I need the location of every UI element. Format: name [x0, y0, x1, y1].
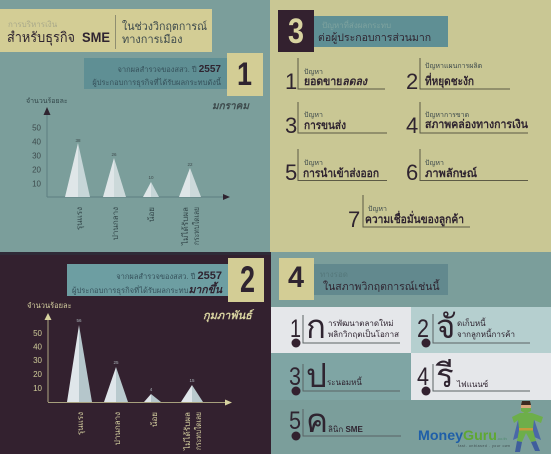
problem 1: ยอดขายลดลง	[304, 76, 368, 88]
solution 4: 4	[417, 363, 429, 391]
solution 1: ารพัฒนาตลาดใหม่	[328, 319, 394, 328]
problem 4: สภาพคล่องทางการเงิน	[425, 118, 528, 131]
chart: January: ปานกลาง	[111, 207, 120, 240]
number badge 4	[279, 258, 314, 300]
problems heading: ปัญหาที่ส่งผลกระทบ	[322, 19, 391, 30]
problem 7	[348, 195, 470, 232]
title block: ทางการเมือง	[122, 33, 183, 46]
problem 6	[406, 149, 528, 185]
solution 2: ดเก็บหนี้	[457, 317, 486, 328]
problem 2: ที่หยุดชะงัก	[425, 72, 474, 89]
solution 5	[289, 402, 401, 440]
chart: January: น้อย	[147, 207, 156, 222]
chart: January: 20	[32, 166, 42, 174]
chart: January: 40	[32, 138, 42, 146]
chart: January	[26, 97, 230, 246]
problem 5: การนำเข้าส่งออก	[303, 166, 379, 180]
number badge 3	[278, 10, 314, 52]
solution 5: ค	[306, 402, 328, 439]
survey caption 1: จากผลสำรวจของสสว. ปี 2557	[118, 64, 221, 75]
solution 5: ลินิก SME	[328, 425, 363, 434]
chart: February: 56	[76, 318, 82, 323]
logo: MoneyGuru: .co.th	[497, 436, 507, 441]
problem 6: ปัญหา	[425, 159, 444, 167]
problem 2: ปัญหาแผนการผลิต	[425, 62, 483, 70]
solution 3: ป	[306, 357, 327, 394]
problem 5: 5	[285, 160, 297, 185]
chart: January: 10	[32, 180, 42, 188]
chart: February: 10	[33, 384, 43, 393]
problem 3: ปัญหา	[304, 111, 323, 119]
chart: January: กระทบใดเลย	[192, 207, 201, 245]
problem 4: ปัญหาการขาด	[425, 111, 469, 119]
title block: ในช่วงวิกฤตการณ์	[122, 20, 207, 33]
problem 1: 1	[285, 69, 297, 94]
solution 3	[289, 357, 400, 396]
survey caption 1	[84, 58, 227, 89]
chart: February: 25	[113, 360, 119, 365]
solution 4	[417, 357, 530, 396]
month label February: กุมภาพันธ์	[203, 309, 255, 323]
icon: superhero mascot	[512, 401, 543, 452]
problem 1: ปัญหา	[304, 68, 323, 76]
problem 7: 7	[348, 207, 360, 232]
chart: February: 30	[33, 356, 43, 365]
title block: การบริหารเงิน	[8, 20, 58, 29]
number badge 3: 3	[288, 12, 304, 51]
problem 7: ปัญหา	[368, 205, 387, 213]
chart: February: 4	[150, 387, 153, 392]
problem 5: ปัญหา	[304, 159, 323, 167]
chart: February	[27, 301, 232, 451]
chart: January: 26	[111, 152, 117, 157]
chart: February: 20	[33, 370, 43, 379]
problem 6: ภาพลักษณ์	[425, 166, 477, 180]
solution 1	[290, 308, 400, 348]
solutions heading: ทางรอด	[320, 270, 348, 279]
title block: สำหรับธุรกิจ	[7, 29, 75, 46]
solution 2: จั	[436, 308, 455, 345]
problem 4	[406, 102, 528, 138]
problem 6: 6	[406, 160, 418, 185]
problem 3: 3	[285, 113, 297, 138]
title block	[0, 9, 212, 52]
title block: SME	[82, 29, 110, 45]
solution 2: จากลูกหนี้การค้า	[457, 328, 515, 340]
solution 3: ระนอมหนี้	[327, 376, 363, 387]
chart: January: 22	[187, 162, 193, 167]
problem 3	[285, 102, 387, 138]
logo: MoneyGuru	[418, 427, 510, 448]
chart: January: 50	[32, 124, 42, 132]
survey caption 2: ผู้ประกอบการธุรกิจที่ได้รับผลกระทบมากขึ้น	[72, 281, 223, 296]
chart: January: 38	[75, 138, 81, 143]
problem 2: 2	[406, 69, 418, 94]
chart: February: จำนวนร้อยละ	[27, 301, 72, 310]
number badge 1	[227, 53, 263, 96]
chart: February: ปานกลาง	[113, 412, 122, 445]
chart: February: 40	[33, 342, 43, 352]
solution 4: รี	[435, 357, 454, 394]
chart: January: 10	[148, 175, 154, 180]
bars January	[65, 143, 201, 197]
panel: solutions	[271, 252, 551, 454]
solution 4: ไฟแนนซ์	[456, 379, 489, 389]
problem 2	[406, 58, 510, 94]
logo: MoneyGuru: fast. unbiased . your own	[458, 444, 510, 448]
chart: January: 30	[32, 152, 42, 160]
number badge 1: 1	[237, 56, 252, 92]
solution 3: 3	[289, 363, 301, 391]
panel: survey February	[0, 252, 271, 454]
survey caption 1: ผู้ประกอบการธุรกิจที่ได้รับผลกระทบดังนี้	[92, 77, 222, 87]
number badge 2: 2	[240, 259, 255, 300]
solution 5: 5	[289, 407, 301, 435]
solution cells background	[271, 307, 551, 400]
chart: February: 15	[189, 378, 195, 383]
problems heading	[314, 16, 448, 47]
chart: February: 50	[33, 329, 43, 338]
month label January: มกราคม	[212, 101, 250, 112]
panel: problems	[270, 0, 551, 252]
chart: February: น้อย	[150, 412, 159, 427]
solution 1: พลิกวิกฤตเป็นโอกาส	[328, 329, 399, 339]
chart: February: รุนแรง	[76, 412, 85, 435]
solution 1: 1	[290, 315, 301, 343]
solution 2: 2	[417, 315, 429, 343]
logo: MoneyGuru: Money	[418, 427, 463, 443]
solution 2	[417, 308, 530, 348]
problem 5	[285, 149, 387, 185]
solutions heading	[314, 264, 448, 295]
problem 3: การขนส่ง	[304, 119, 346, 132]
problem 4: 4	[406, 113, 418, 138]
survey caption 2: จากผลสำรวจของสสว. ปี 2557	[116, 270, 222, 282]
panel: survey January	[0, 0, 270, 252]
chart: January: รุนแรง	[75, 207, 84, 230]
chart: February: ไม่ได้รับผล	[183, 412, 192, 451]
solution 1: ก	[306, 308, 326, 345]
problems heading: ต่อผู้ประกอบการส่วนมาก	[318, 32, 431, 44]
chart: February: กระทบใดเลย	[194, 412, 203, 450]
chart: January: จำนวนร้อยละ	[26, 97, 68, 105]
problem 1	[285, 58, 385, 94]
problem 7: ความเชื่อมั่นของลูกค้า	[365, 210, 464, 227]
number badge 2	[228, 258, 264, 302]
bars February	[67, 325, 203, 402]
survey caption 2	[67, 264, 228, 296]
chart: January: ไม่ได้รับผล	[181, 207, 190, 246]
number badge 4: 4	[288, 261, 304, 294]
solutions heading: ในสภาพวิกฤตการณ์เช่นนี้	[323, 279, 440, 293]
logo: MoneyGuru: Guru	[463, 427, 497, 443]
